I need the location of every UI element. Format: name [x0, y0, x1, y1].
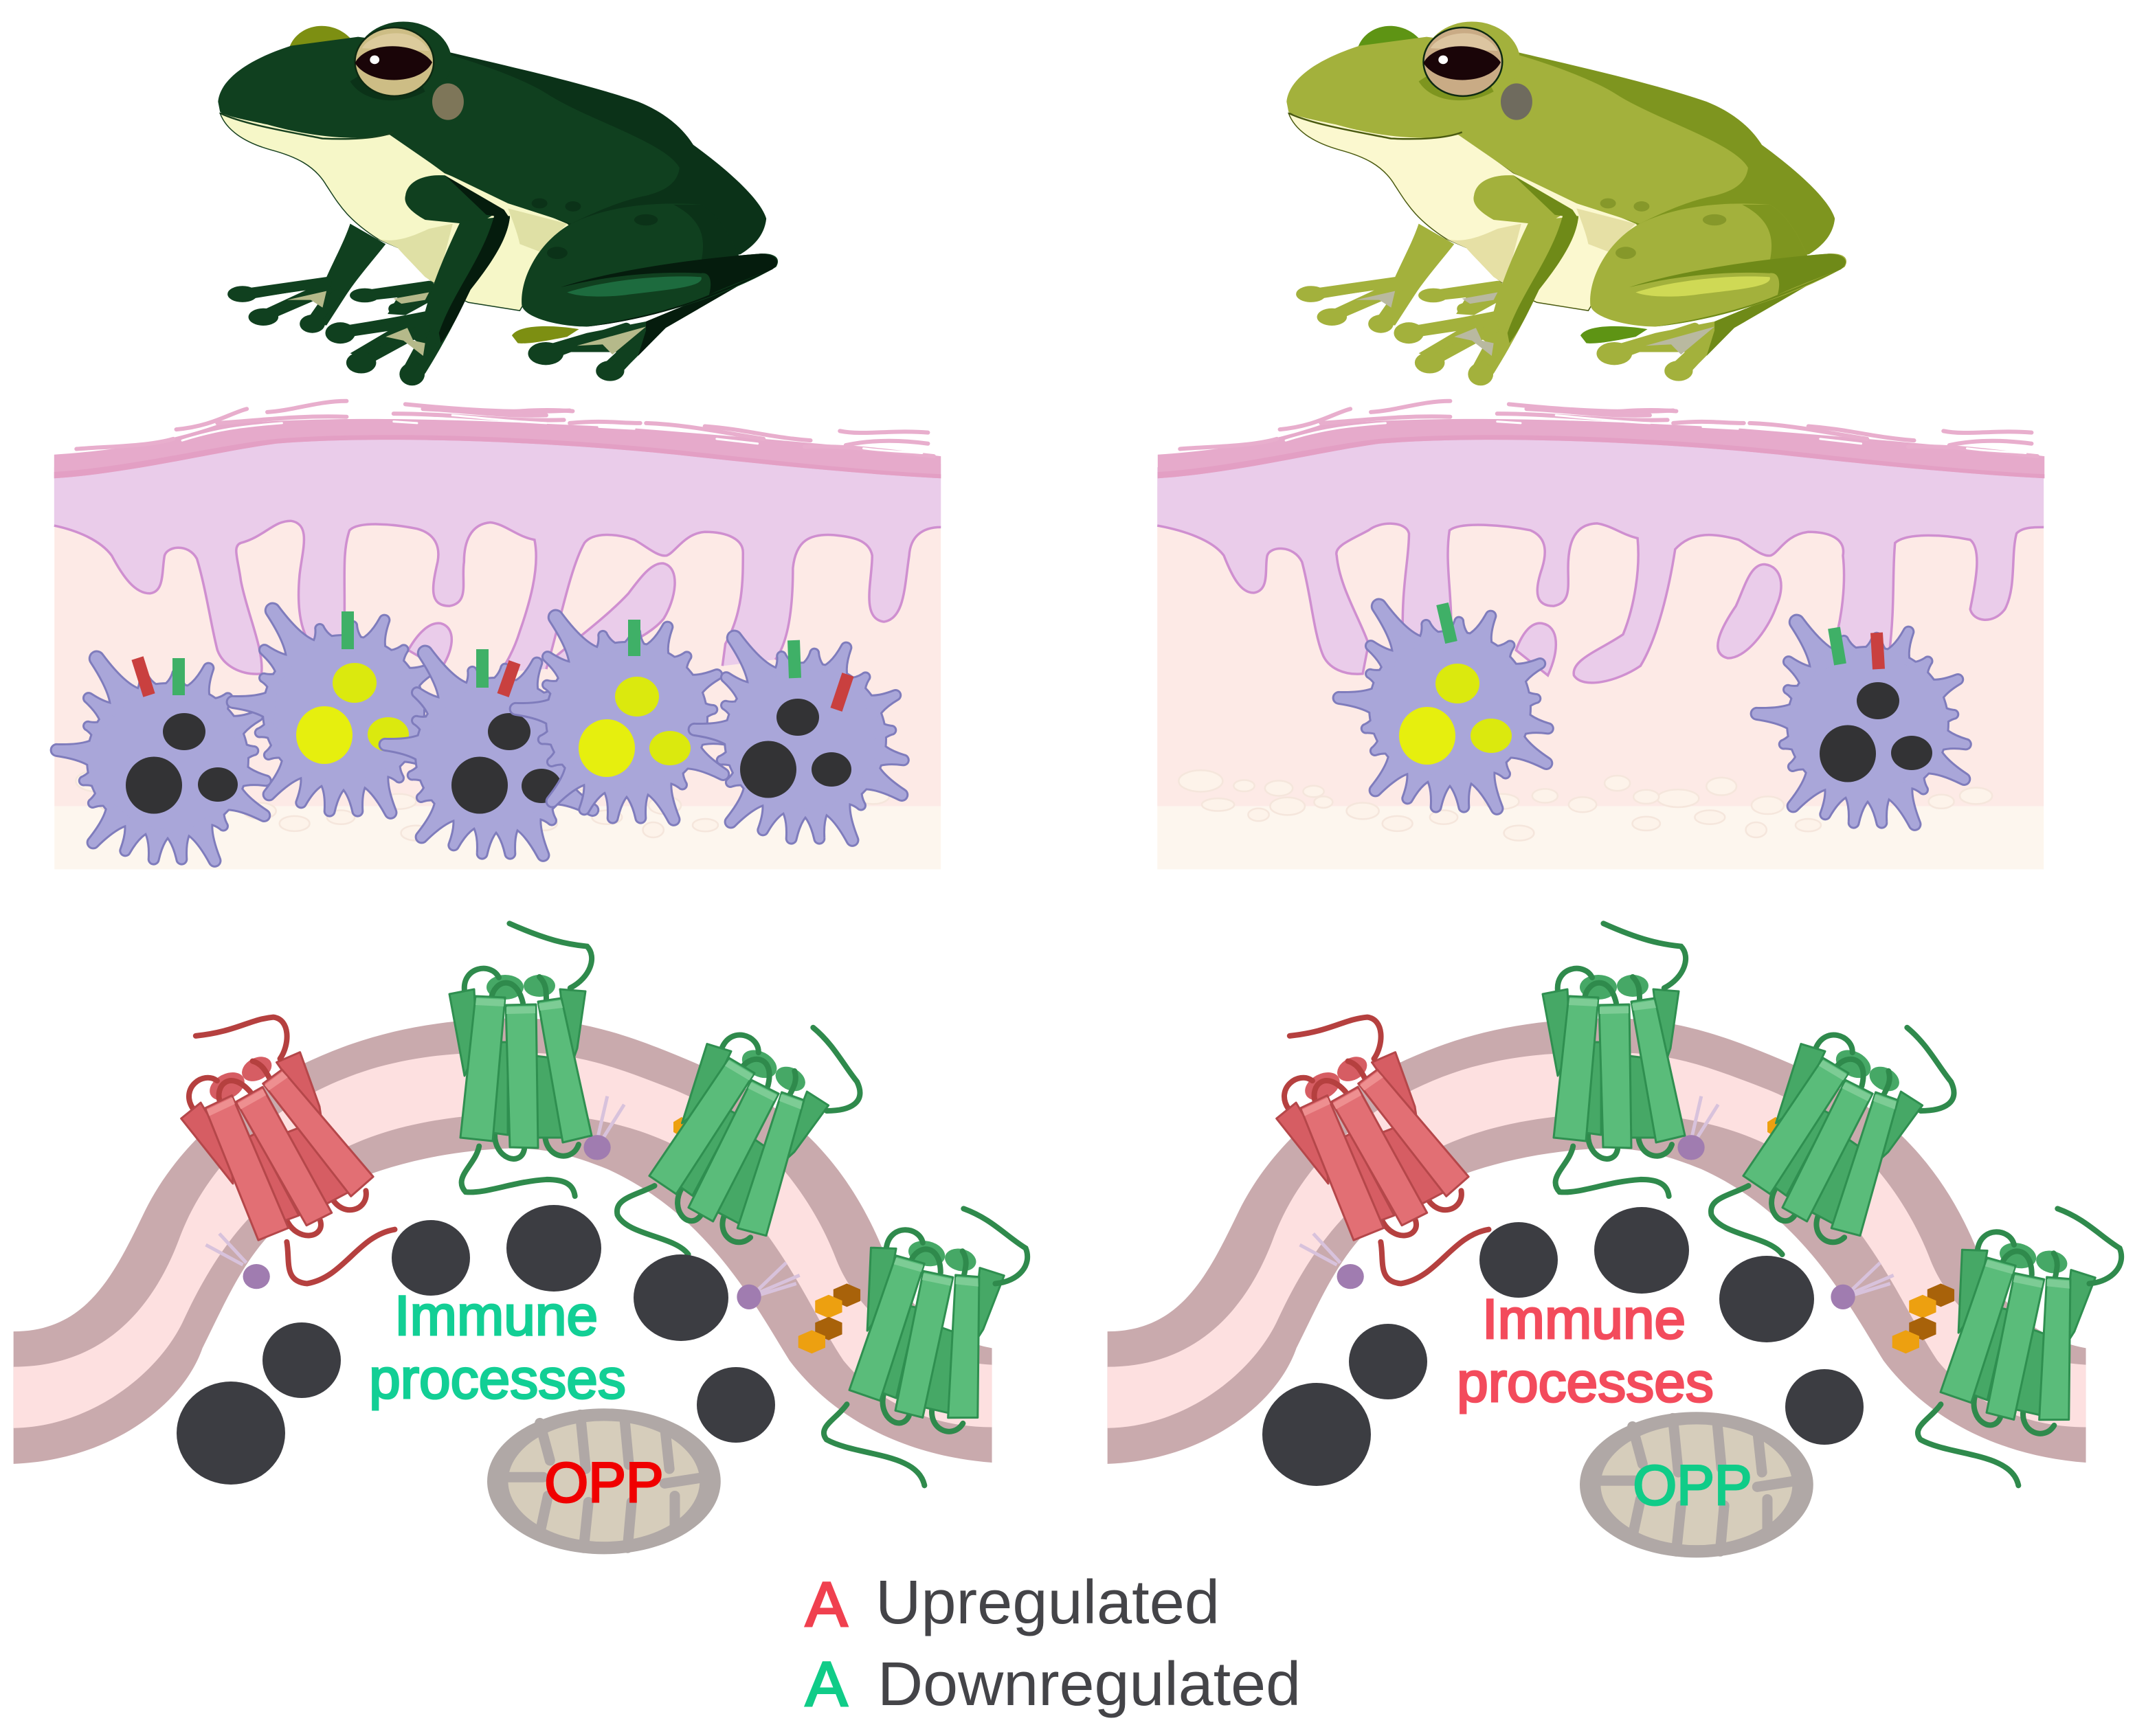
frog: dark morph: [218, 21, 778, 385]
legend: downregulated: A: [805, 1649, 848, 1720]
label: immune processes: processes: [1457, 1351, 1714, 1414]
panel: skin section, light frog: [1157, 401, 2044, 869]
cell 3: [379, 635, 606, 868]
channel: downregulated lower right: [834, 1223, 1016, 1441]
channel: upregulated: [169, 1029, 384, 1264]
label: immune processes: Immune: [394, 1285, 598, 1347]
cell 5: [688, 620, 915, 853]
label: immune processes: Immune: [1482, 1288, 1686, 1351]
legend: downregulated: Downregulated: [878, 1650, 1301, 1719]
channel: downregulated upper right: [1723, 1022, 1938, 1256]
label: OPP: OPP: [544, 1452, 664, 1514]
channel: downregulated top: [1543, 969, 1685, 1159]
frog: light morph: [1286, 21, 1846, 385]
cell 2: [1750, 605, 1978, 837]
label: immune processes: [1457, 1288, 1714, 1414]
epidermis with ridges: [54, 429, 941, 674]
mitochondrion: [487, 1408, 721, 1554]
cell 1: [1332, 589, 1560, 821]
panel: membrane, light frog: [1108, 923, 2121, 1557]
channel: downregulated lower right: [1925, 1225, 2107, 1443]
label: OPP: OPP: [1633, 1454, 1752, 1517]
rete lobes: [408, 563, 675, 669]
epidermis with ridges: [1157, 429, 2044, 683]
rete lobes: [1516, 564, 1781, 675]
cell 4: [509, 600, 737, 832]
cell 1: [50, 641, 278, 873]
channel: downregulated upper right: [629, 1022, 845, 1256]
legend: [805, 1568, 1301, 1720]
legend: upregulated: Upregulated: [875, 1568, 1220, 1637]
mitochondrion: [1580, 1412, 1813, 1557]
legend: upregulated: A: [805, 1570, 848, 1640]
cell 2: [226, 593, 454, 825]
panel: skin section, dark frog: [50, 401, 941, 873]
label: immune processes: processes: [369, 1348, 626, 1410]
protein tails: [1290, 923, 2121, 1485]
label: immune processes: [369, 1285, 626, 1410]
melanosomes: [1262, 1207, 1864, 1486]
panel: membrane, dark frog: [14, 923, 1027, 1554]
melanosomes: [177, 1205, 775, 1485]
channel: downregulated top: [449, 969, 592, 1159]
channel: upregulated: [1264, 1029, 1479, 1264]
protein tails: [196, 923, 1027, 1485]
